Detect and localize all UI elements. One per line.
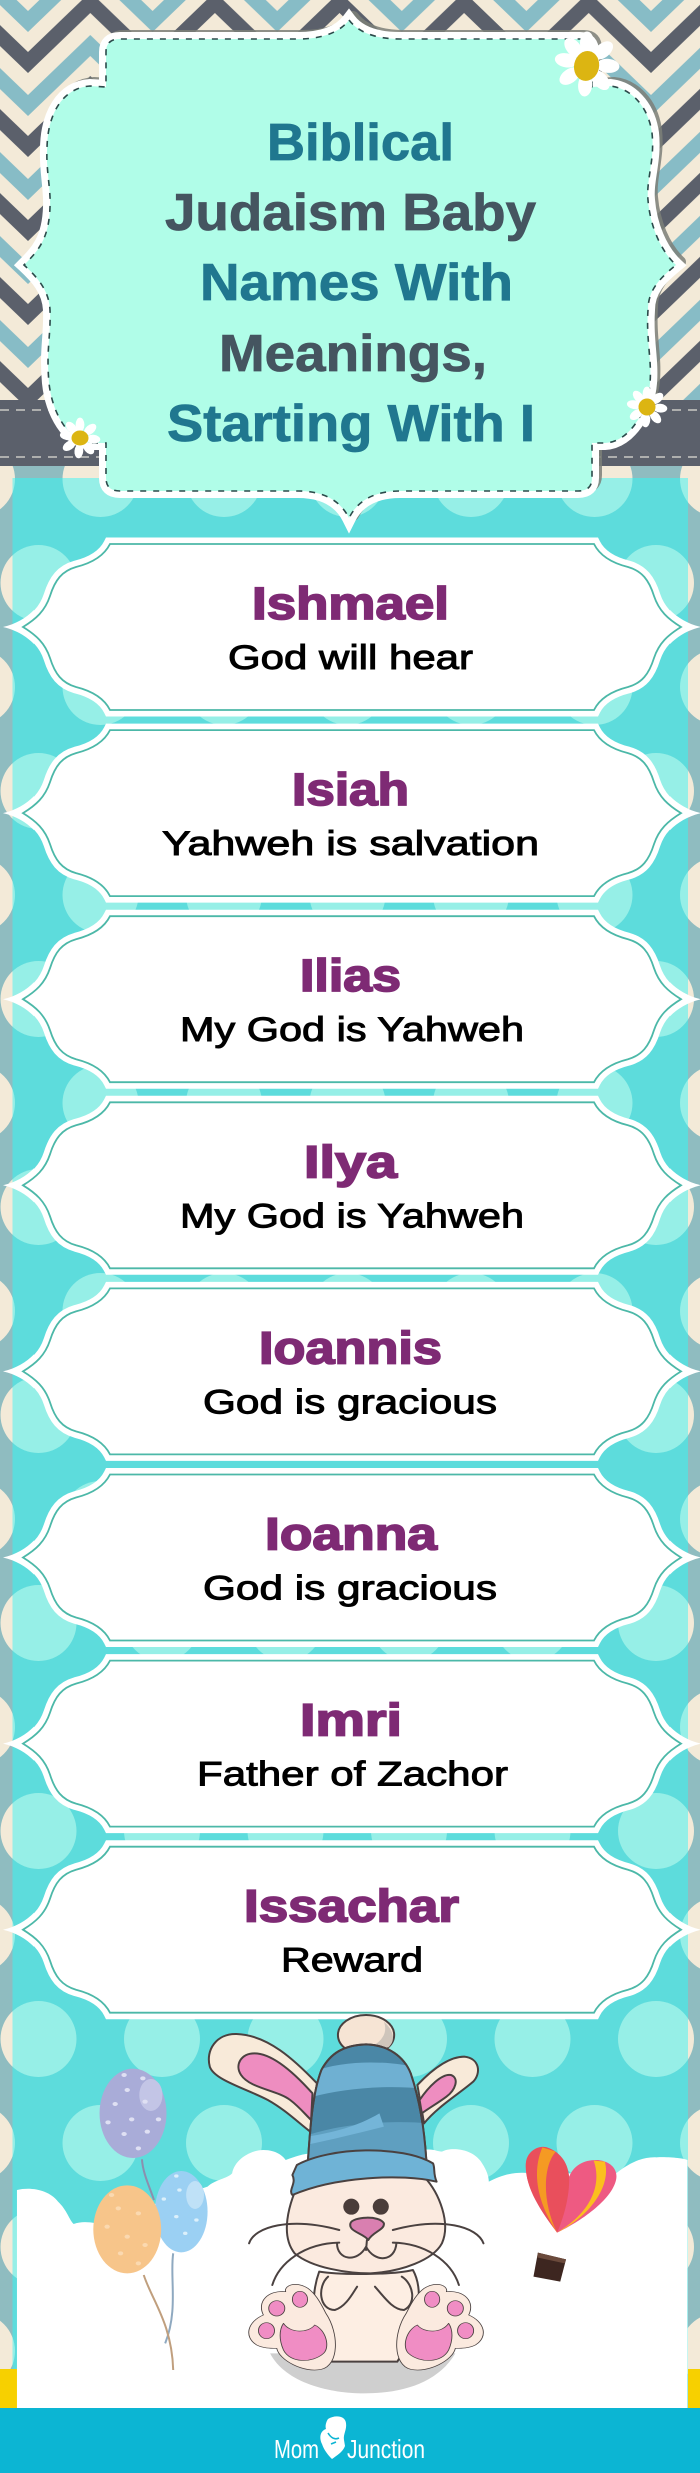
card: Ishmael <box>3 544 700 710</box>
chevron header background <box>0 0 700 400</box>
heart hot-air balloon <box>526 2147 616 2282</box>
MomJunction logo <box>274 2416 425 2464</box>
title: Meanings, <box>219 325 487 383</box>
card: Ishmael: God will hear <box>228 639 473 677</box>
title: Judaism Baby <box>165 184 536 242</box>
card: Issachar: Reward <box>281 1942 423 1980</box>
card: Ioanna: God is gracious <box>203 1570 497 1608</box>
card: Ioannis <box>3 1288 700 1454</box>
card: Isiah <box>3 730 700 896</box>
side strips with cream dots <box>0 466 700 2408</box>
teal polka-dot panel <box>12 478 688 2408</box>
striped hat <box>307 2043 428 2160</box>
card: Ioanna: Ioanna <box>265 1508 438 1560</box>
grey stitched band <box>0 400 700 466</box>
icon: daisy top right <box>554 31 620 97</box>
right ear <box>417 2057 478 2123</box>
card: Issachar <box>3 1847 700 2013</box>
nose and mouth <box>337 2218 396 2258</box>
card: Ioannis: God is gracious <box>203 1383 497 1421</box>
whiskers <box>249 2224 483 2285</box>
footer bar <box>0 2408 700 2473</box>
arms <box>321 2277 412 2310</box>
title <box>165 114 536 453</box>
title: Starting With I <box>167 395 535 453</box>
right foot <box>397 2284 483 2370</box>
title: Names With <box>200 254 513 312</box>
balloons <box>93 2069 208 2370</box>
yellow corner strips <box>0 2369 700 2408</box>
bunny <box>209 2015 483 2370</box>
title panel <box>24 17 680 518</box>
ground shadow <box>270 2353 455 2393</box>
card: Ioannis: Ioannis <box>259 1322 442 1373</box>
card: Isiah: Yahweh is salvation <box>162 825 539 863</box>
bottom illustration <box>17 2015 687 2408</box>
title: Biblical <box>267 114 454 172</box>
card: Isiah: Isiah <box>292 764 409 815</box>
MomJunction logo: Mom <box>274 2434 319 2464</box>
card: Ilya: My God is Yahweh <box>180 1197 524 1235</box>
card: Imri: Imri <box>300 1695 402 1746</box>
icon: daisy bottom left <box>59 418 101 459</box>
MomJunction logo: Junction <box>347 2434 425 2464</box>
head <box>287 2173 445 2273</box>
card: Ilias: My God is Yahweh <box>180 1011 524 1049</box>
card: Ilya: Ilya <box>304 1136 398 1187</box>
clouds <box>17 2149 687 2408</box>
left ear <box>209 2034 317 2132</box>
pom-pom <box>338 2015 394 2055</box>
card: Ioanna <box>3 1474 700 1640</box>
left foot <box>249 2284 335 2370</box>
card: Issachar: Issachar <box>244 1881 459 1932</box>
card: Imri: Father of Zachor <box>197 1756 508 1794</box>
body <box>314 2270 419 2362</box>
card: Ilias <box>3 916 700 1082</box>
icon: daisy bottom right <box>626 387 668 428</box>
card: Imri <box>3 1661 700 1827</box>
hat brim <box>291 2150 437 2195</box>
logo icon <box>320 2416 346 2459</box>
eyes <box>343 2199 389 2215</box>
card: Ilya <box>3 1102 700 1268</box>
card: Ilias: Ilias <box>300 950 401 1001</box>
card: Ishmael: Ishmael <box>252 578 449 629</box>
